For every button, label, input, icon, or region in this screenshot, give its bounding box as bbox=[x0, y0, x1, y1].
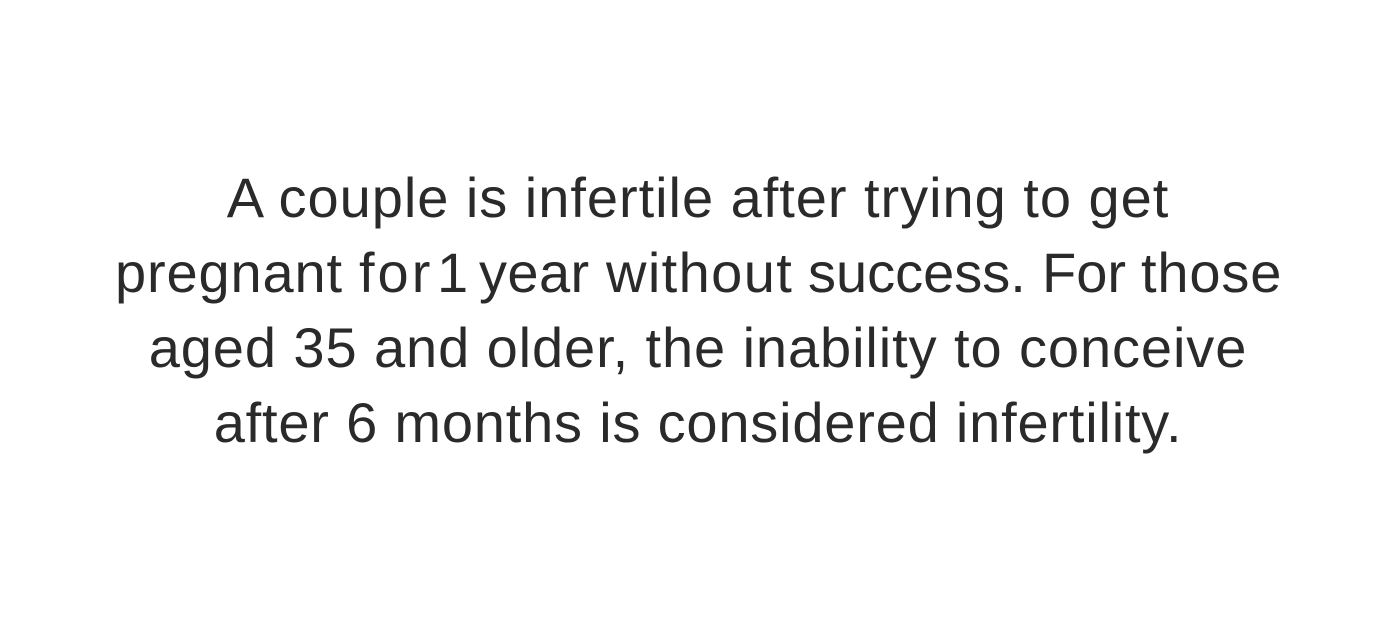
text block: infertility definition bbox=[115, 166, 1282, 454]
text block: infertility definition: A couple is infertile after trying to get bbox=[227, 166, 1169, 229]
text block: infertility definition: pregnant bbox=[115, 241, 343, 304]
text block: infertility definition: after 6 months is considered infertility. bbox=[214, 391, 1182, 454]
text block: infertility definition: aged 35 and older, the inability to conceive bbox=[149, 316, 1247, 379]
text block: infertility definition: without bbox=[606, 241, 793, 304]
text block: infertility definition: those bbox=[1141, 241, 1282, 304]
text block: infertility definition: success. bbox=[808, 241, 1026, 304]
text block: infertility definition: year bbox=[479, 241, 590, 304]
text block: infertility definition: for bbox=[359, 241, 433, 304]
text block: infertility definition: 1 bbox=[437, 241, 468, 304]
text block: infertility definition: For bbox=[1042, 241, 1126, 304]
